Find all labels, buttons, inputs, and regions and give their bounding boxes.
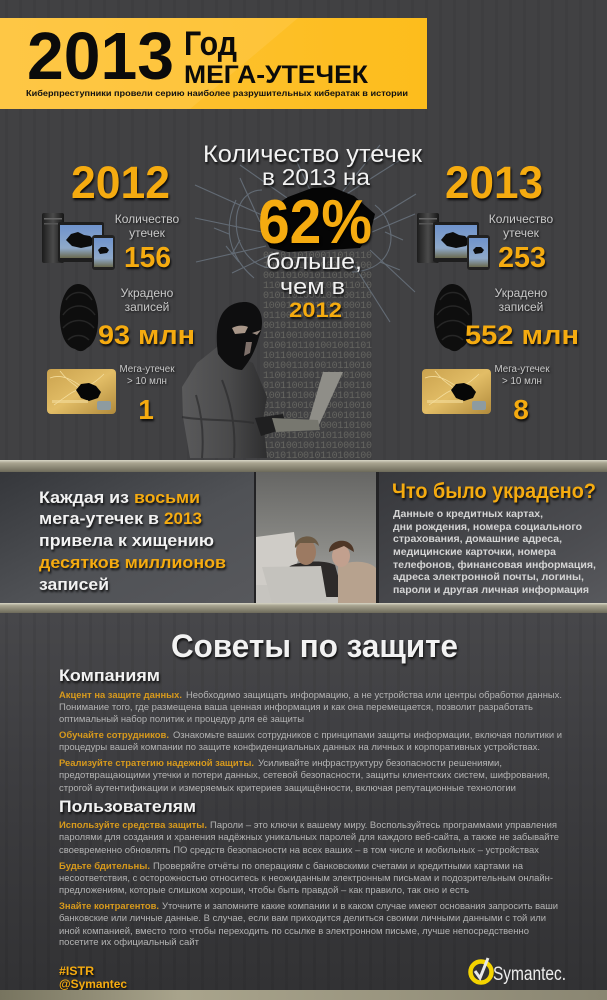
panel: what was stolen: пароли и другая личная информация	[393, 584, 589, 596]
binary column: 0011001011010010110	[263, 411, 372, 422]
big percentage: 62%	[258, 188, 372, 257]
panel: eight mega breaches: привела к хищению	[39, 531, 214, 550]
stolen records: записей	[125, 300, 169, 314]
stolen records	[98, 286, 195, 350]
stolen records: 93 млн	[98, 320, 195, 350]
icon: breached devices	[417, 213, 490, 270]
stolen records: записей	[499, 300, 543, 314]
mega breaches	[119, 364, 175, 425]
centre message: 2012	[289, 299, 342, 322]
band: bottom	[0, 990, 607, 1000]
tips for users: Пароли – это ключи к вашему миру. Воспользуйтесь программами управления	[210, 820, 557, 831]
tips for users: Проверяйте отчёты по операциям с банковскими счетами и кредитными картами на	[153, 861, 524, 872]
central illustration	[182, 145, 416, 462]
breach count: 253	[498, 242, 546, 274]
year 2012: 2012	[71, 157, 170, 208]
panel: what was stolen: телефонов, финансовая информация,	[393, 559, 596, 571]
cracked glass	[195, 145, 416, 322]
year 2013: 2013	[445, 157, 543, 208]
tips for companies: процедуры вашей компании по защите конфиденциальных данных на личных и корпоративных устройствах.	[59, 742, 540, 753]
panel: what was stolen: страхования, домашние адреса,	[393, 533, 562, 545]
binary column: 1010010011000110100	[263, 421, 372, 432]
laptop	[307, 372, 343, 427]
pillows	[256, 532, 298, 603]
binary column: 0011010010110100100	[263, 271, 372, 282]
heading: Советы по защите	[171, 628, 458, 664]
binary column: 0101101000101100110	[263, 291, 372, 302]
tips for companies: строгой аутентификации и измеряемых критериев защищённости, включая репутационные технологии	[59, 783, 516, 794]
hacker	[182, 302, 343, 458]
tips for companies: Реализуйте стратегию надежной защиты.	[59, 758, 254, 769]
breach hole	[262, 187, 375, 252]
centre message: в 2013 на	[262, 164, 370, 190]
icon: fingerprint	[434, 284, 472, 351]
binary column: 1100101001101001000	[263, 371, 372, 382]
binary column: 0101100110100100110	[263, 381, 372, 392]
binary column: 0100110100101100100	[263, 431, 372, 442]
panel: security tips	[0, 603, 607, 991]
binary column: 1101001001101000110	[263, 441, 372, 452]
tips for companies: оптимальный набор политик и процедур для её защиты	[59, 714, 304, 725]
man	[287, 561, 344, 597]
binary column: 0110010011010010110	[263, 311, 372, 322]
binary column: 1101001000110101100	[263, 331, 372, 342]
tips for users: иной компанией, вместо того чтобы переходить по ссылке в электронном письме, лучше непосредственно	[59, 926, 529, 937]
panel: eight mega breaches: Каждая из	[39, 488, 129, 507]
icon: fingerprint	[60, 284, 98, 351]
stolen records	[465, 286, 579, 350]
title subject: МЕГА-УТЕЧЕК	[184, 61, 369, 89]
panel: eight mega breaches: десятков миллионов	[39, 553, 226, 572]
panel: 2012	[42, 157, 195, 425]
tips for users: паролями для создания и хранения надёжных уникальных паролей для каждого веб-сайта, а также не забывайте	[59, 832, 559, 843]
binary column: 0100110100011010110	[263, 251, 372, 262]
mega breaches: > 10 млн	[502, 376, 542, 387]
icon: Symantec logo: Symantec.	[493, 964, 566, 985]
tips for users	[59, 820, 559, 948]
tips for users: банковские или личные данные. В случае, если вам приходится делиться своими личными данными с той или	[59, 913, 546, 924]
laptop	[262, 566, 327, 603]
breach count: утечек	[503, 226, 540, 240]
hashtags: #ISTR	[59, 964, 94, 978]
subtitle: Киберпреступники провели серию наиболее разрушительных кибератак в истории	[26, 88, 408, 98]
binary column: 1000110101100100010	[263, 301, 372, 312]
hashtags	[59, 964, 127, 991]
binary column: 0010011010010110010	[263, 361, 372, 372]
centre message	[203, 141, 423, 322]
companies heading: Компаниям	[59, 666, 160, 685]
centre message: чем в	[280, 274, 345, 299]
panel: 2013	[417, 157, 579, 425]
panel: eight mega breaches	[0, 472, 256, 603]
band: middle top	[0, 460, 607, 472]
stolen records: Украдено	[495, 286, 548, 300]
tips for users: несоответствия, с осторожностью относитесь к неожиданным электронным письмам и подозрительным онлайн-	[59, 873, 553, 884]
woman	[338, 562, 376, 603]
binary column	[263, 251, 372, 462]
binary column: 1001101000110101100	[263, 391, 372, 402]
tips for companies: Усиливайте инфраструктуру безопасности решениями,	[258, 758, 502, 769]
panel: eight mega breaches: 2013	[164, 509, 202, 528]
tips for users: своевременно обновлять ПО средств безопасности на всех ваших – в том числе и мобильных – устройствах	[59, 845, 539, 856]
tips for companies: Обучайте сотрудников.	[59, 730, 169, 741]
mega breaches: > 10 млн	[127, 376, 167, 387]
tips for companies: Акцент на защите данных.	[59, 690, 182, 701]
icon: breached devices	[42, 213, 115, 270]
breach count: Количество	[115, 212, 180, 226]
stolen records: 552 млн	[465, 320, 579, 350]
tips for companies: Необходимо защищать информацию, а не устройства или центры обработки данных.	[186, 690, 562, 701]
title year: 2013	[27, 19, 174, 94]
panel: eight mega breaches: восьми	[134, 488, 200, 507]
binary column: 1001001011000101100	[263, 261, 372, 272]
panel: what was stolen: медицинские карточки, номера	[393, 546, 556, 558]
icon: credit card	[47, 369, 116, 414]
tips for users: Знайте контрагентов.	[59, 901, 159, 912]
icon: Symantec logo	[470, 958, 566, 985]
photo: couple with laptop	[254, 472, 379, 603]
tips for companies: предотвращающими утечки и потери данных, сетевой безопасности, защиты клиентских систем, шифрования,	[59, 770, 550, 781]
mega breaches: 8	[513, 394, 529, 425]
breach count: утечек	[129, 226, 166, 240]
binary column: 1100100110100011010	[263, 281, 372, 292]
breach count	[115, 212, 180, 274]
binary column: 0100101101001001101	[263, 341, 372, 352]
mega breaches: 1	[138, 394, 154, 425]
mega breaches	[494, 364, 550, 425]
tips for users: Уточните и запомните какие компании и в каком случае имеют основания запросить ваши	[162, 901, 558, 912]
tips for users: предложениям, которые слишком хороши, чтобы быть правдой – как правило, так оно и есть	[59, 885, 469, 896]
tips for users: Используйте средства защиты.	[59, 820, 207, 831]
panel: eight mega breaches: мега-утечек в	[39, 509, 159, 528]
breach count: Количество	[489, 212, 554, 226]
panel: what was stolen: Данные о кредитных картах,	[393, 508, 543, 520]
centre message: Количество утечек	[203, 141, 423, 168]
tips for companies	[59, 690, 562, 794]
tips for companies: Понимание того, где размещена ваша ценная информация и как она перемещается, позволит разработать	[59, 702, 533, 713]
icon: credit card	[422, 369, 491, 414]
mega breaches: Мега-утечек	[494, 364, 550, 375]
binary column: 0010110100110100100	[263, 321, 372, 332]
title word: Год	[184, 25, 237, 63]
tips for companies: Ознакомьте ваших сотрудников с принципами защиты информации, включая политики и	[173, 730, 562, 741]
header banner	[0, 18, 427, 109]
panel: what was stolen: Что было украдено?	[392, 480, 596, 503]
centre message: больше,	[266, 249, 362, 274]
breach count: 156	[124, 242, 171, 274]
mega breaches: Мега-утечек	[119, 364, 175, 375]
tips for users: посетите их официальный сайт	[59, 937, 200, 948]
stolen records: Украдено	[121, 286, 174, 300]
panel: what was stolen: адреса электронной почты, логины,	[393, 571, 584, 583]
panel: what was stolen: дни рождения, номера социального	[393, 521, 582, 533]
binary column: 0110100101100010010	[263, 401, 372, 412]
tips for users: Будьте бдительны.	[59, 861, 150, 872]
panel: what was stolen	[379, 472, 607, 603]
hashtags: @Symantec	[59, 977, 127, 991]
binary column: 1011000100110100100	[263, 351, 372, 362]
binary column: 0010110010110100100	[263, 451, 372, 462]
breach count	[489, 212, 554, 274]
panel: eight mega breaches: записей	[39, 575, 109, 594]
users heading: Пользователям	[59, 797, 196, 816]
